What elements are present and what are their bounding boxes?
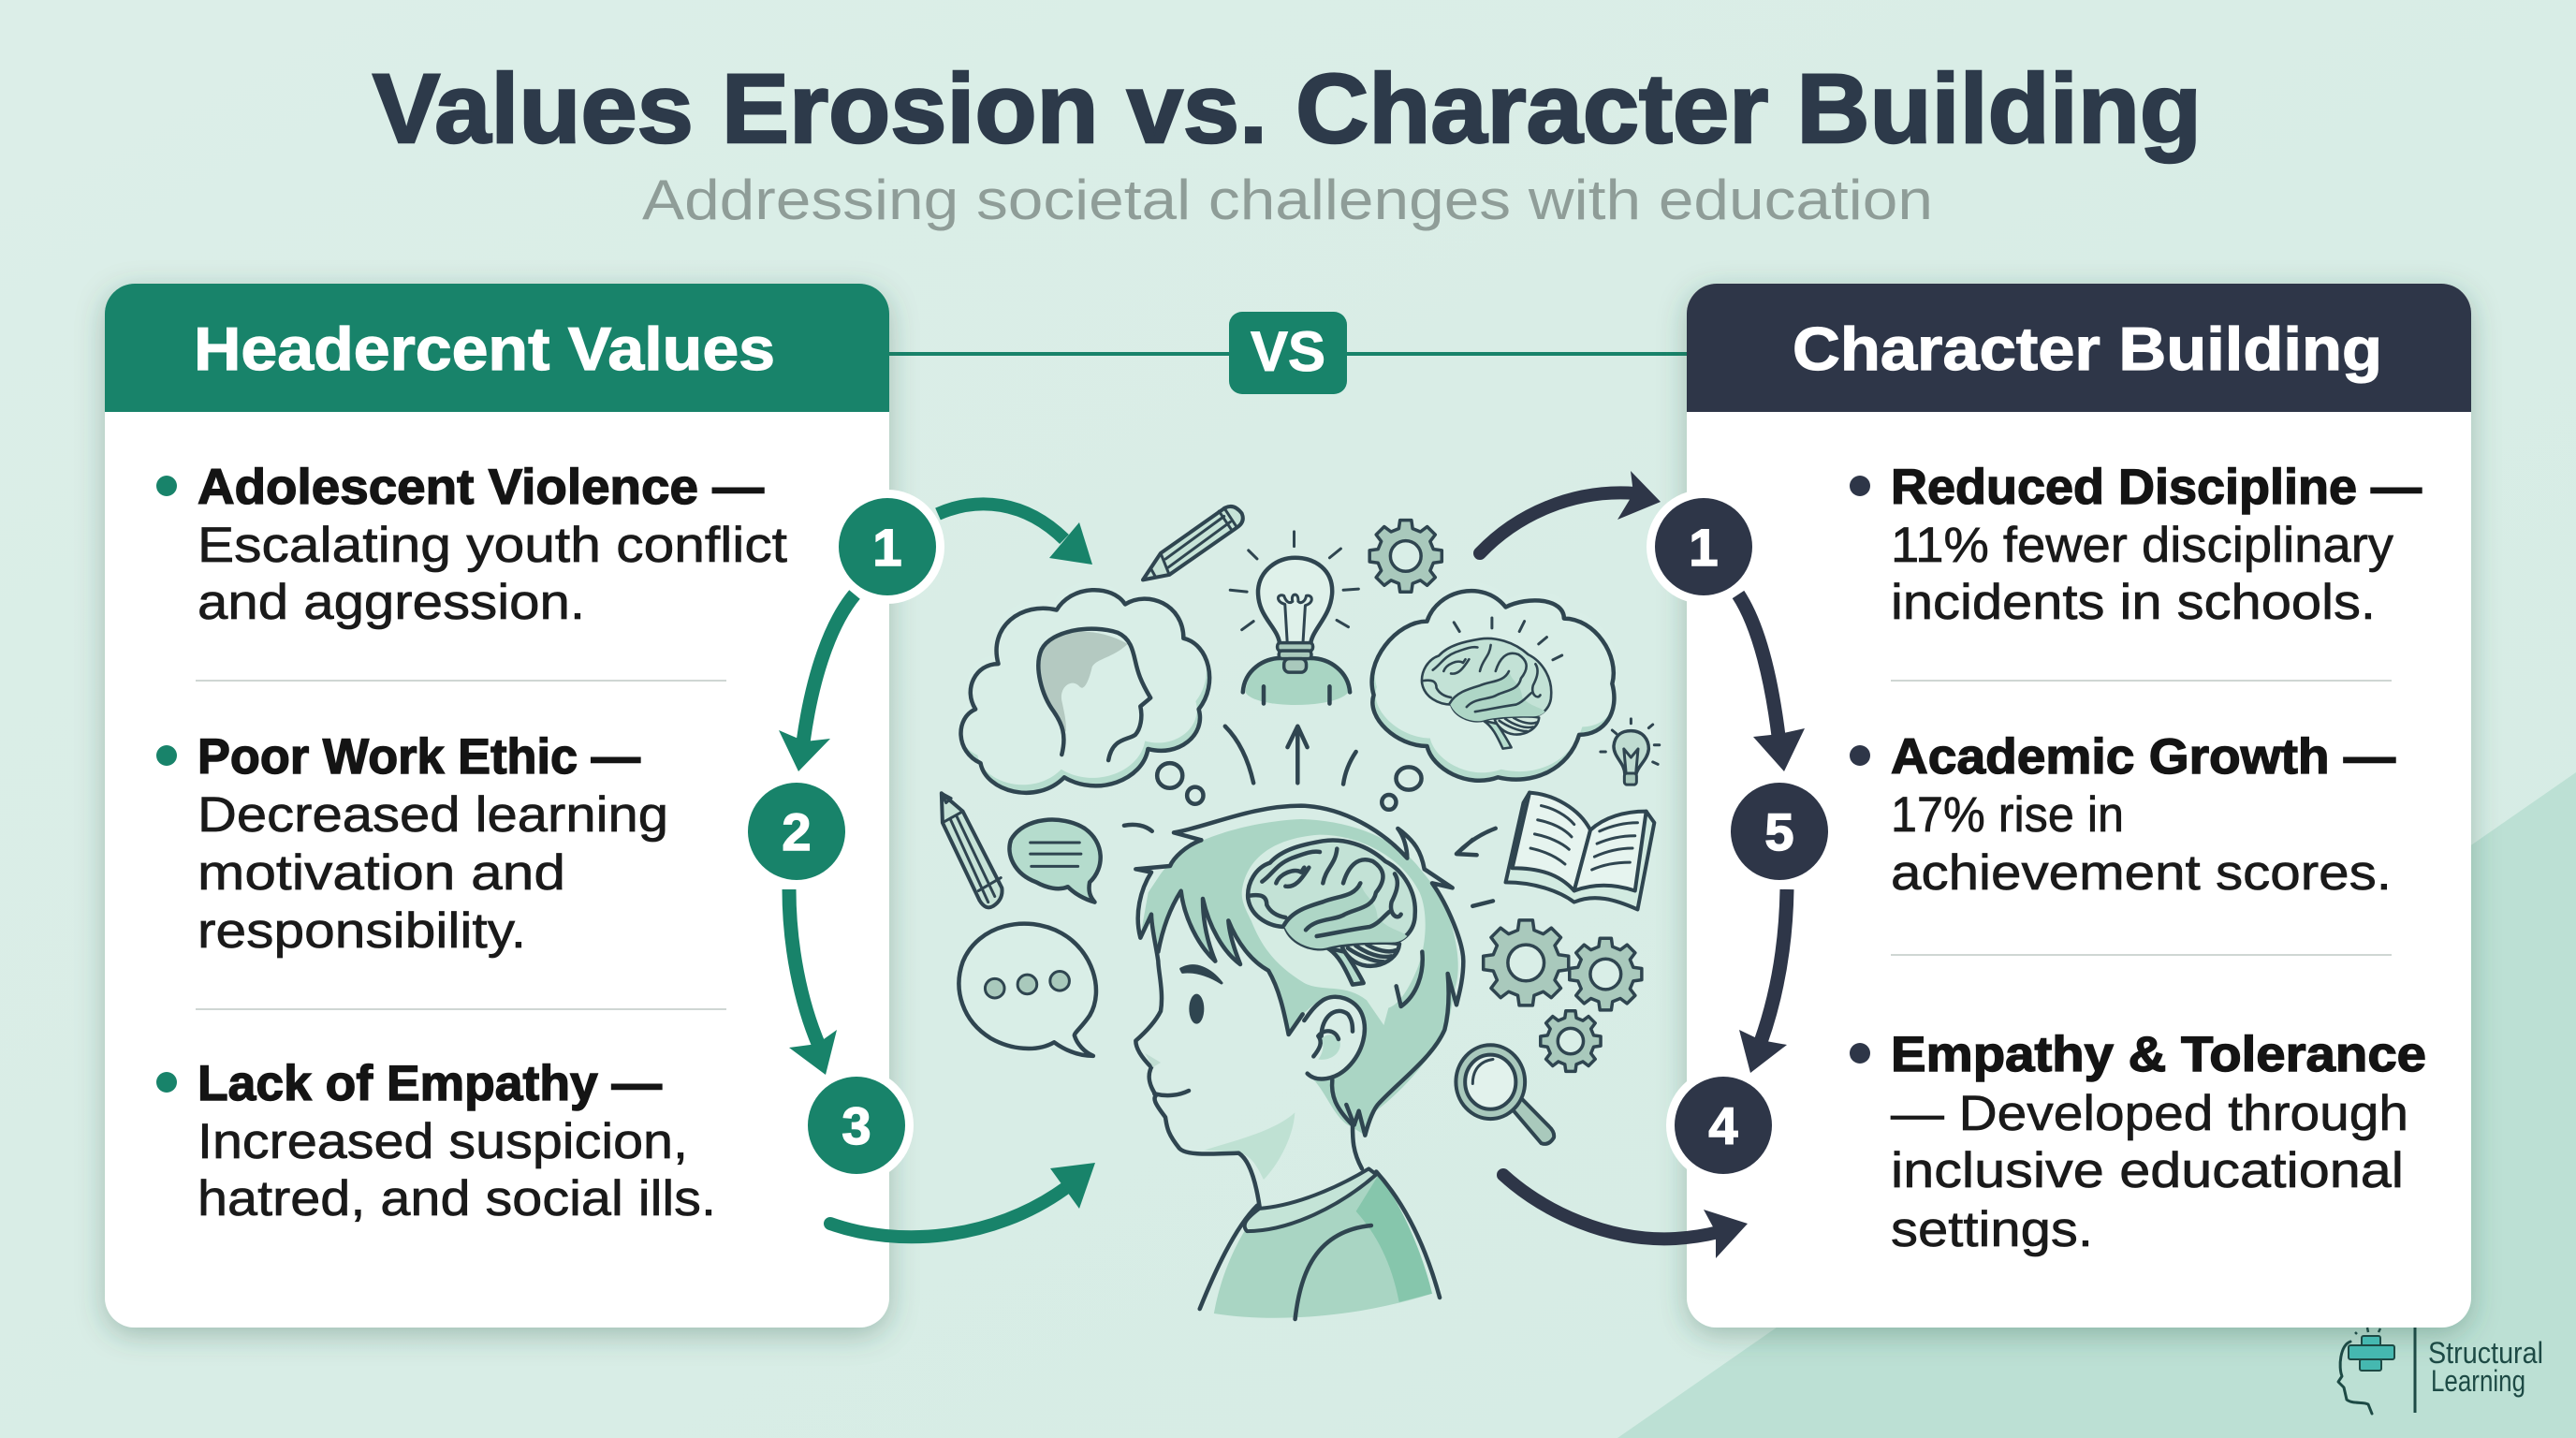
number badge: left 2: 2 [782,802,812,861]
item: reduced discipline: 11% fewer disciplinary [1891,518,2394,573]
item: empathy and tolerance: Empathy & Tolerance [1891,1027,2426,1082]
arrow: 1 to center, green [938,504,1092,565]
item: reduced discipline: incidents in schools. [1891,575,2376,630]
arrow: 1 to 5, dark [1738,594,1805,771]
item: empathy and tolerance: — Developed through [1891,1086,2408,1141]
icon: lightbulb with person [1230,532,1358,705]
panel: left values [105,284,889,1328]
icon: speech bubble with lines [1009,820,1101,902]
item: adolescent violence: and aggression. [198,575,585,630]
thought cloud: brain [1372,583,1617,781]
neck shadow [1205,1112,1295,1180]
number badge: left 1: 1 [872,518,902,577]
arrow: 2 to 3, green [789,889,837,1075]
icon: magnifying glass [1456,1045,1554,1144]
number badge: right 5 [1722,774,1837,888]
thought bubbles right [1382,767,1422,810]
item: adolescent violence: Adolescent Violence — [198,460,764,515]
illustration: surrounding idea icons [942,506,1660,1319]
arrow: top right, dark [1480,471,1661,553]
item: lack of empathy [156,1056,716,1226]
arrow: 5 to 4, dark [1739,889,1787,1073]
item: lack of empathy: hatred, and social ills. [198,1171,716,1226]
number badge: left 1 [830,490,944,604]
number badge: left 2 [739,774,854,888]
panel: right character building [1687,284,2471,1328]
logo: Structural Learning: Learning [2431,1364,2525,1398]
item: poor work ethic: motivation and [198,845,565,901]
item: adolescent violence [156,460,787,630]
item: reduced discipline: Reduced Discipline — [1891,460,2422,515]
icon: small pencil [942,793,1003,907]
item: poor work ethic: Decreased learning [198,787,668,843]
item: academic growth: Academic Growth — [1891,729,2395,785]
brain inside head [1248,841,1415,985]
small idea arrows [1124,726,1496,906]
vs badge: VS [1251,320,1325,383]
number badge: right 4 [1666,1068,1780,1182]
background corner triangle [1617,772,2576,1438]
shirt [1200,1168,1440,1319]
number badge: right 4: 4 [1708,1096,1738,1155]
face features [1154,966,1222,1095]
boy head [1135,806,1463,1214]
item: adolescent violence: Escalating youth conflict [198,518,787,573]
item: poor work ethic [156,729,668,959]
arrow: bottom right, dark [1503,1175,1748,1258]
item: empathy and tolerance: inclusive educational [1891,1143,2404,1198]
number badge: left 3: 3 [842,1096,871,1155]
number badge: right 1: 1 [1689,518,1719,577]
number badge: left 3 [799,1068,914,1182]
icon: gear top [1369,521,1442,592]
title: Values Erosion vs. Character Building [373,54,2202,164]
icon: pencil top [1143,506,1243,580]
icon: gears group [1484,920,1642,1071]
icon: small lightbulb [1601,719,1660,785]
item: poor work ethic: responsibility. [198,903,526,959]
item: empathy and tolerance: settings. [1891,1202,2093,1257]
subtitle: Addressing societal challenges with education [642,169,1933,231]
right header: Character Building [1793,315,2382,383]
item: lack of empathy: Lack of Empathy — [198,1056,662,1111]
arrow: 3 to center, green [830,1163,1095,1237]
logo icon [2338,1328,2394,1414]
vs connector line [889,352,1688,356]
item: reduced discipline [1850,460,2422,630]
icon: speech bubble with dots [959,924,1096,1056]
vs badge [1229,312,1347,394]
number badge: right 5: 5 [1764,802,1794,861]
item: lack of empathy: Increased suspicion, [198,1114,688,1169]
item: poor work ethic: Poor Work Ethic — [198,729,640,785]
thought cloud: head silhouette [958,582,1209,793]
head outline [1135,806,1463,1214]
left header [105,284,889,412]
item: academic growth [1850,729,2395,901]
right header [1687,284,2471,412]
item: empathy and tolerance [1850,1027,2426,1257]
thought bubbles left [1157,763,1203,804]
icon: open book [1506,793,1654,909]
logo: Structural Learning: Structural [2428,1336,2543,1370]
item: academic growth: achievement scores. [1891,845,2392,901]
hair fill [1140,819,1458,1136]
arrow: 1 to 2, green [779,594,855,771]
left header: Headercent Values [194,315,775,383]
logo: Structural Learning [2338,1328,2543,1414]
number badge: right 1 [1647,490,1761,604]
item: academic growth: 17% rise in [1891,787,2124,843]
